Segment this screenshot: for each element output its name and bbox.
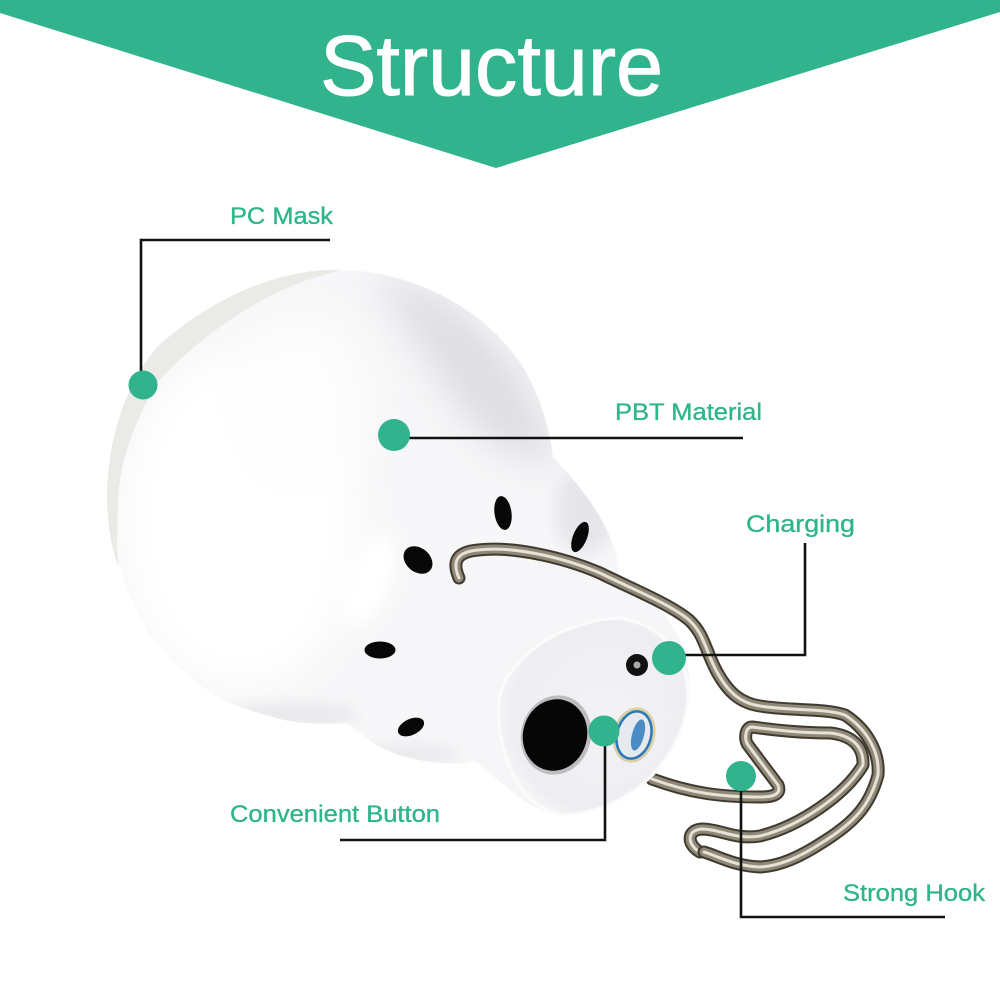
- title: Structure: [320, 19, 663, 114]
- leader line: Charging: [680, 543, 805, 655]
- marker: Charging: [652, 641, 686, 675]
- banner: green header: [0, 0, 1000, 168]
- power button: [512, 687, 600, 783]
- label: Strong Hook: Strong Hook: [843, 880, 986, 907]
- label: Charging: Charging: [746, 511, 855, 538]
- leader line: Convenient Button: [340, 745, 605, 840]
- leader line: Strong Hook: [741, 790, 945, 917]
- product: solar bulb: [107, 270, 878, 867]
- bulb: PC mask rim: [107, 270, 340, 565]
- charging port: [626, 654, 648, 676]
- marker: Convenient Button: [588, 716, 620, 746]
- marker: Strong Hook: [726, 761, 756, 791]
- bulb: end cylinder: [396, 544, 689, 816]
- QC sticker: [606, 703, 662, 767]
- bulb: PBT body: [117, 270, 640, 765]
- leader line: PBT Material: [405, 437, 743, 439]
- wire hook: inner strand: [652, 727, 863, 852]
- label: PBT Material: PBT Material: [615, 399, 762, 426]
- leader line: PC Mask: [141, 240, 330, 375]
- marker: PC Mask: [128, 370, 158, 400]
- bulb: ventilation holes: [364, 495, 592, 740]
- bulb: end face: [499, 618, 688, 815]
- marker: PBT Material: [378, 419, 410, 451]
- label: PC Mask: PC Mask: [230, 203, 334, 230]
- wire hook: outer strand: [456, 549, 878, 867]
- label: Convenient Button: Convenient Button: [230, 801, 440, 828]
